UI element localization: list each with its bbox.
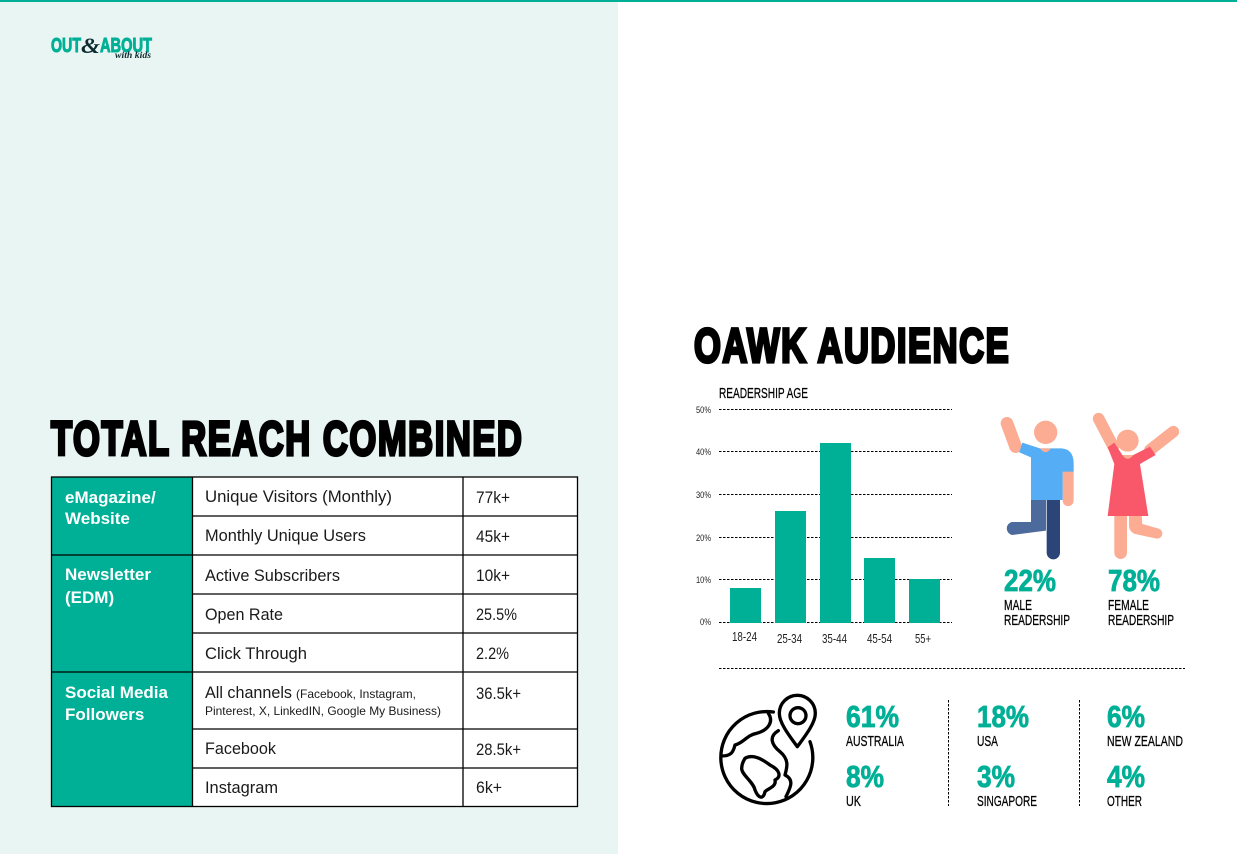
stat: male readership (1004, 563, 1070, 629)
stat: usa (977, 699, 1029, 750)
stat: singapore: SINGAPORE (977, 793, 1037, 810)
logo (51, 33, 152, 60)
stat: female readership (1108, 563, 1174, 629)
y axis labels: 40% (696, 447, 711, 457)
stat: new zealand: NEW ZEALAND (1107, 733, 1183, 750)
stat: other: OTHER (1107, 793, 1142, 810)
row: instagram (205, 778, 502, 797)
stat: usa: 18% (977, 699, 1029, 734)
row: facebook: 28.5k+ (476, 740, 521, 759)
row: unique visitors (205, 487, 510, 507)
stat: singapore (977, 759, 1037, 810)
stat: usa: USA (977, 733, 998, 750)
row: active subscribers: 10k+ (476, 566, 510, 585)
row group: eMagazine/Website: Website (65, 509, 130, 528)
row: unique visitors: 77k+ (476, 488, 510, 507)
stat: male readership: 22% (1004, 563, 1056, 598)
row: facebook (205, 739, 521, 759)
bar chart: readership age (696, 385, 952, 646)
row: monthly unique users (205, 526, 510, 546)
x axis labels (732, 629, 931, 646)
y axis labels: 50% (696, 405, 711, 415)
stat: female readership: READERSHIP (1108, 612, 1174, 629)
logo: OUT (51, 35, 81, 57)
top accent line (0, 0, 1237, 2)
row group: eMagazine/Website: eMagazine/ (65, 488, 156, 507)
row: facebook: Facebook (205, 739, 276, 758)
stat: other (1107, 759, 1145, 810)
chart title: READERSHIP AGE (719, 385, 808, 402)
x axis labels: 18-24 (732, 629, 757, 644)
stat: uk (846, 759, 884, 810)
logo: with kids (115, 50, 152, 60)
icon: female figure (1099, 419, 1173, 559)
stat: uk: 8% (846, 759, 884, 794)
icon: male figure (1007, 421, 1074, 559)
stat: female readership: 78% (1108, 563, 1160, 598)
stat: australia (846, 699, 904, 750)
y axis labels: 20% (696, 533, 711, 543)
logo: ABOUT (100, 35, 152, 57)
row: all channels: Pinterest, X, LinkedIN, Google My Business) (205, 704, 441, 718)
stat: australia: 61% (846, 699, 899, 734)
row: monthly unique users: Monthly Unique Users (205, 526, 366, 545)
stat: uk: UK (846, 793, 861, 810)
icon: globe with location pin (721, 695, 815, 804)
x axis labels: 25-34 (777, 631, 802, 646)
row: open rate: 25.5% (476, 605, 517, 624)
left panel background (0, 0, 618, 854)
bars (730, 443, 940, 623)
row group: Social Media Followers: Social Media (65, 683, 169, 702)
row: click through: 2.2% (476, 644, 509, 663)
row: click through: Click Through (205, 644, 307, 663)
x axis labels: 35-44 (822, 631, 847, 646)
x axis labels: 45-54 (867, 631, 892, 646)
row group: Newsletter: Newsletter (65, 565, 151, 584)
heading: oawk audience: OAWK AUDIENCE (694, 318, 1009, 372)
row: unique visitors: Unique Visitors (Monthly) (205, 487, 392, 506)
row: open rate: Open Rate (205, 605, 283, 624)
stat: male readership: MALE (1004, 597, 1032, 614)
y axis labels: 30% (696, 490, 711, 500)
row: all channels: (Facebook, Instagram, (296, 687, 416, 701)
logo: & (81, 33, 100, 58)
row: all channels: 36.5k+ (476, 684, 521, 703)
row: active subscribers (205, 566, 510, 585)
y axis labels: 10% (696, 575, 711, 585)
stat: male readership: READERSHIP (1004, 612, 1070, 629)
row: open rate (205, 605, 517, 624)
row: active subscribers: Active Subscribers (205, 566, 340, 585)
y axis labels (696, 405, 711, 627)
x axis labels: 55+ (915, 631, 931, 646)
stat: new zealand (1107, 699, 1183, 750)
row group: Newsletter: (EDM) (65, 588, 114, 607)
row: monthly unique users: 45k+ (476, 527, 510, 546)
stat: other: 4% (1107, 759, 1145, 794)
stat: australia: AUSTRALIA (846, 733, 904, 750)
row: instagram: Instagram (205, 778, 278, 797)
heading: total reach combined: TOTAL REACH COMBINED (51, 411, 522, 465)
row: click through (205, 644, 509, 663)
reach table (52, 477, 578, 807)
row: all channels: All channels (205, 683, 292, 702)
row: instagram: 6k+ (476, 778, 502, 797)
stat: new zealand: 6% (1107, 699, 1145, 734)
y axis labels: 0% (700, 617, 711, 627)
row: all channels (205, 683, 521, 718)
row group: Social Media Followers: Followers (65, 705, 144, 724)
stat: female readership: FEMALE (1108, 597, 1149, 614)
stat: singapore: 3% (977, 759, 1015, 794)
